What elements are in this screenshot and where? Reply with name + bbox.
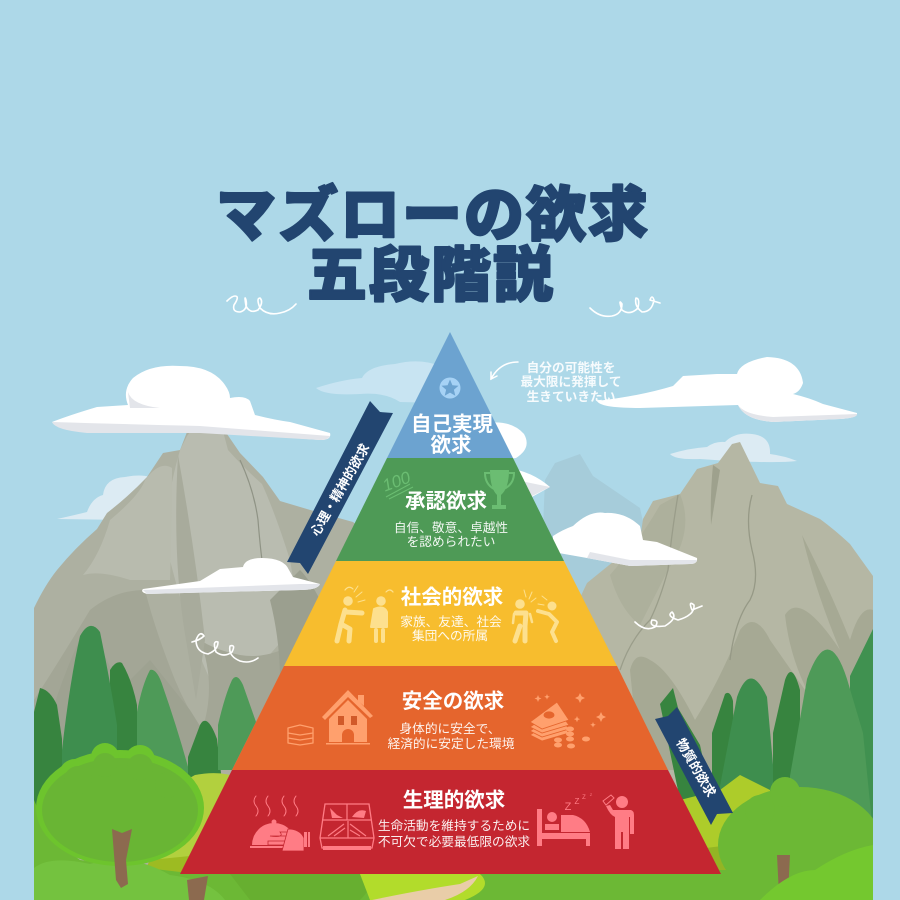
callout text: 最大限に発揮して [520,374,622,389]
pale background clouds [57,361,797,520]
icon: house [322,690,373,744]
icon: man drinking [603,795,634,849]
tier 4 label: 承認欲求 [405,490,487,513]
callout text: 自分の可能性を [527,360,615,375]
foreground hills [34,773,873,900]
icon: food cloche [250,796,310,851]
title [216,182,650,309]
icon: sleeping in bed: Z [565,801,572,813]
cloud: upper left [52,366,330,440]
tier 1 description: 不可欠で必要最低限の欲求 [378,834,530,849]
title: マズローの欲求 [216,182,650,249]
tier 5 label: 自己実現 [411,413,493,436]
tier 4 description: を認められたい [407,535,495,549]
cloud behind pyramid top [480,422,550,498]
forest spires [34,626,873,850]
tier 3 description: 家族、友達、社会 [400,615,502,629]
tier 2 description: 経済的に安定した環境 [388,736,515,751]
tier 5: self-actualization [387,332,513,458]
cloud: lower left [142,558,320,594]
callout text [520,360,622,404]
left mountain [34,417,400,880]
far blue mountain [540,454,660,600]
tier 3 description [400,615,502,643]
tier 1 label: 生理的欲求 [403,789,506,812]
callout text: 生きていきたい [527,389,615,404]
icon: trophy [485,470,514,509]
cloud: upper right [597,357,857,422]
icon: money and coins [530,693,606,748]
tier 1 description: 生命活動を維持するために [378,819,530,833]
icon: arguing pair right [513,590,557,641]
tier 4 description: 自信、敬意、卓越性 [394,520,508,535]
ribbon: psychological needs [287,401,393,574]
title: 五段階説 [307,242,555,309]
decorative loops [192,296,702,662]
ribbon: psychological needs: 心理・精神的欲求 [308,441,373,539]
icon: 100 mark: 100 [380,468,414,495]
tier 3 description: 集団への所属 [412,629,488,643]
icon: meal tray [320,804,374,850]
right tree [716,760,900,900]
tier 1: physiological [180,770,721,874]
small trunk [187,876,208,900]
icon: star badge [440,378,460,398]
cloud: right middle [553,513,697,566]
icon: sleeping in bed [537,792,593,846]
tier 2 description: 身体的に安全で、 [400,721,500,736]
tier 4: esteem [336,458,564,561]
tier 3: social [284,561,617,666]
ribbon: material needs: 物質的欲求 [673,736,719,800]
icon: sleeping in bed: Z [590,792,593,797]
tier 2 description [388,721,515,751]
icon: sleeping in bed: Z [575,797,580,806]
icon: books [288,725,313,745]
pyramid [180,332,721,874]
tier 5 label: 欲求 [430,434,472,457]
callout arrow [491,362,518,379]
tier 3 label: 社会的欲求 [401,586,504,609]
left tree [36,743,204,888]
tier 5 label [411,413,493,457]
tier 4 description [394,520,508,549]
right mountain [560,442,873,860]
tier 1 description [378,819,530,849]
tier 2: safety [232,666,668,770]
ribbon: material needs [655,707,733,825]
icon: sleeping in bed: Z [582,795,586,801]
icon: arguing pair left [337,586,393,641]
tier 2 label: 安全の欲求 [402,690,505,713]
